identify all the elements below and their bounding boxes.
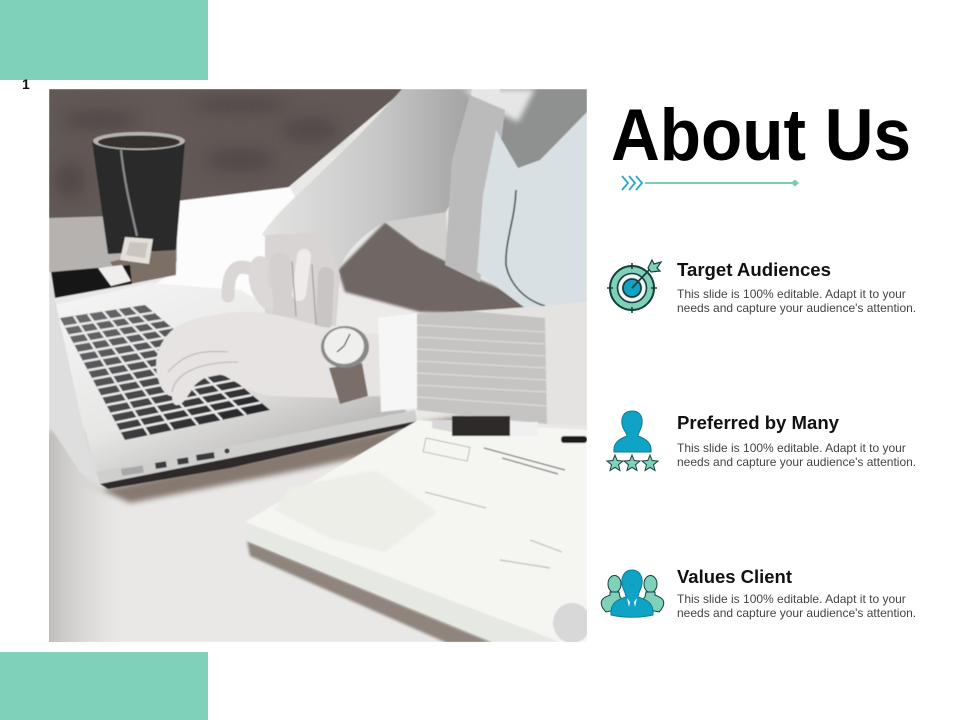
icon: group of three people [601,570,664,617]
pale hair strands [462,89,535,122]
notebook [245,420,591,643]
line [645,182,795,184]
heading: Preferred by Many [677,413,839,433]
pale table under wrist [338,290,344,304]
laptop shadow [100,421,417,489]
photo: hands typing on a laptop [40,89,591,650]
wood under phone [110,246,176,285]
finger shadow lines [168,351,238,392]
front hand [156,312,382,405]
heading: Target Audiences [677,260,831,280]
laptop front edge [96,410,417,484]
cup [92,132,185,264]
shirt placket line [506,190,545,306]
laptop lid [50,278,84,474]
table surface white [157,186,295,298]
body text: needs and capture your audience's attention. [677,455,916,469]
grey area top right [500,89,587,169]
shirt cuff [378,313,417,412]
bottom accent block [0,652,208,720]
laptop ports [121,448,230,476]
knit sleeve [416,305,548,424]
cardigan front [445,95,505,282]
sleeve upper arm [262,89,472,272]
top accent block [0,0,208,80]
notebook shadow band [247,541,493,643]
brown band under laptop [80,415,470,503]
title: About Us [611,95,911,176]
heading: Values Client [677,567,792,587]
laptop base [54,283,415,482]
photo base table [49,89,587,642]
slide number: 1 [22,76,30,92]
shirt [477,112,587,308]
body text: This slide is 100% editable. Adapt it to your [677,287,906,301]
brick wall background [49,89,405,218]
grey reflection left [49,428,104,642]
wood table right [338,222,524,314]
phone [51,265,132,298]
diamond end [791,180,799,186]
keyboard [60,305,270,440]
body text: needs and capture your audience's attention. [677,301,916,315]
white patch on table behind arm [386,212,448,260]
back hand [228,232,340,326]
pen [432,416,587,443]
chevrons [622,176,642,190]
body text: This slide is 100% editable. Adapt it to your [677,592,906,606]
item: values client [601,567,916,620]
item: target audiences [607,260,916,315]
watch [321,326,369,404]
body text: needs and capture your audience's attention. [677,606,916,620]
body text: This slide is 100% editable. Adapt it to your [677,441,906,455]
icon: target [607,260,661,313]
table surface grey left [49,214,177,272]
arrow divider [622,176,799,190]
icon: person with stars [607,411,658,470]
item: preferred by many [607,411,916,470]
